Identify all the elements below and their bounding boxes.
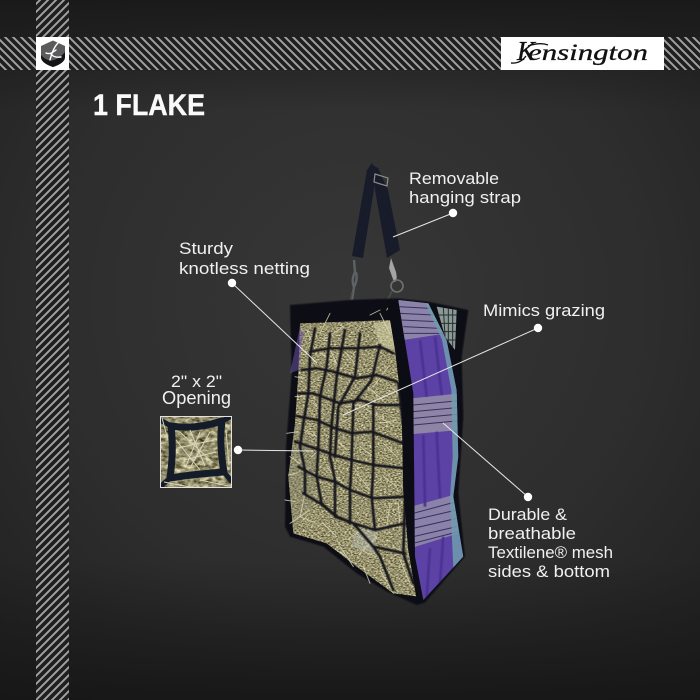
black bag body (285, 298, 468, 605)
callout: 2 x 2 opening (160, 372, 313, 488)
striped band: vertical (36, 0, 69, 700)
hay filling (288, 320, 418, 597)
purple mesh side panel (398, 300, 464, 600)
callout: mimics grazing: Mimics grazing (483, 301, 605, 320)
callout: durable breathable mesh (443, 423, 613, 581)
callout: sturdy knotless netting: Sturdy (179, 239, 234, 258)
brand logo: Kensington (501, 36, 664, 70)
hay bag product (285, 163, 468, 605)
callout: mimics grazing (343, 301, 605, 415)
net (295, 328, 413, 590)
callout: sturdy knotless netting: knotless netting (179, 259, 310, 278)
black binding strip (387, 299, 424, 604)
title: 1 FLAKE (93, 89, 205, 122)
callout: sturdy knotless netting (179, 239, 317, 363)
brand logo: Kensington: K (516, 36, 537, 66)
callout: durable breathable mesh: Textilene® mesh (488, 543, 613, 562)
callout: 2 x 2 opening: Opening (162, 388, 231, 408)
callout: durable breathable mesh: Durable & (488, 505, 568, 524)
callout: durable breathable mesh: sides & bottom (488, 562, 610, 581)
callout: removable hanging strap: hanging strap (409, 188, 521, 207)
hanging strap (350, 163, 403, 303)
callout: removable hanging strap: Removable (409, 169, 499, 188)
callout: removable hanging strap (393, 169, 521, 237)
icon: Kensington shield logo (36, 37, 69, 70)
striped band: horizontal (0, 37, 700, 70)
callout: 2 x 2 opening: 2" x 2" (171, 372, 222, 391)
brand logo: Kensington: ensington (528, 40, 648, 65)
hay shading (288, 320, 395, 553)
inset net photo (160, 416, 232, 488)
callout: durable breathable mesh: breathable (488, 524, 576, 543)
plaid gusset (437, 307, 457, 350)
hay straws (285, 300, 410, 593)
